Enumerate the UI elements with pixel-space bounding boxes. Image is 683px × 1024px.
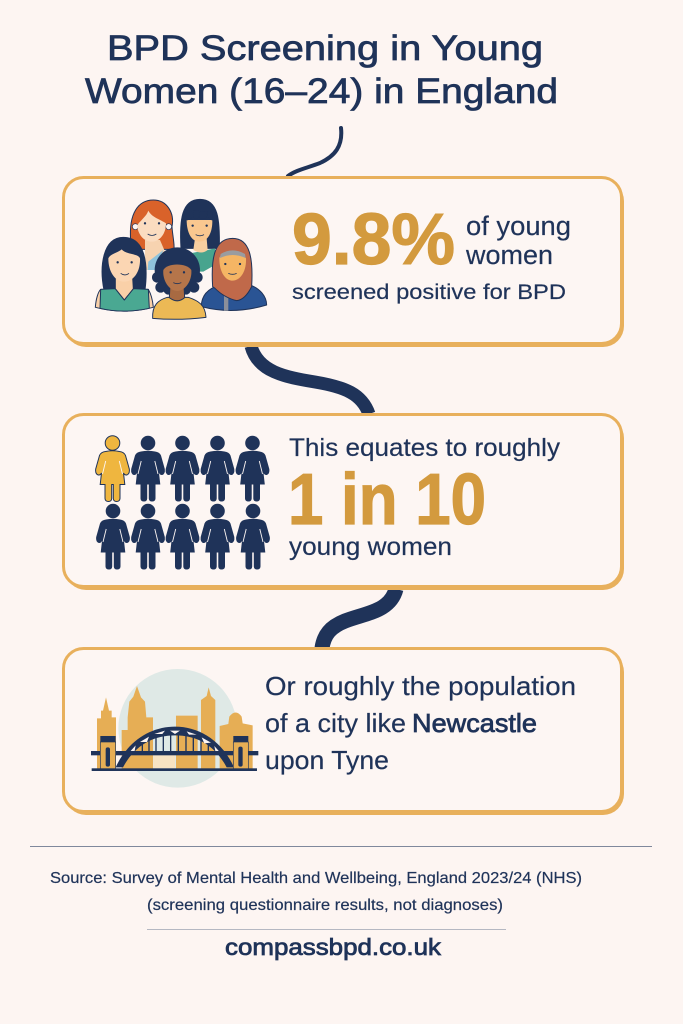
text: of young women: women <box>465 240 553 270</box>
text: screened positive for BPD: screened positive for BPD <box>292 281 566 304</box>
source note: (screening questionnaire results, not diagnoses) <box>147 897 503 914</box>
front centre woman <box>152 247 206 319</box>
icon: group of five young women <box>95 199 267 319</box>
title: Women (16–24) in England <box>85 72 558 111</box>
text: this equates to roughly: This equates to roughly <box>289 434 561 462</box>
back left woman <box>130 200 174 270</box>
front left woman <box>95 237 153 311</box>
connector: first to second panel <box>251 346 369 414</box>
big number 9.8%: 9.8% <box>292 200 455 280</box>
connector: title to first panel <box>288 128 341 176</box>
source note <box>50 870 582 914</box>
website: compassbpd.co.uk <box>225 934 442 960</box>
title: BPD Screening in Young <box>107 29 543 68</box>
text: young women: young women <box>289 533 452 561</box>
panel: 9.8% statistic <box>64 178 624 347</box>
woman in hijab <box>201 238 267 311</box>
source note: Source: Survey of Mental Health and Wellbeing, England 2023/24 (NHS) <box>50 870 582 887</box>
back right woman <box>181 199 219 272</box>
big number 1 in 10: 1 in 10 <box>288 460 486 540</box>
icon: ten women pictogram, one highlighted <box>96 436 270 570</box>
title <box>85 29 558 111</box>
connector: second to third panel <box>322 589 396 648</box>
highlighted woman <box>96 436 129 502</box>
hangers <box>142 733 208 752</box>
text: population comparison: Newcastle <box>412 708 537 738</box>
text: population comparison: upon Tyne <box>265 745 389 775</box>
icon: Newcastle skyline and Tyne Bridge <box>91 669 258 788</box>
text: of young women: of young <box>466 211 571 241</box>
text: population comparison: of a city like <box>265 708 406 738</box>
text: population comparison: Or roughly the population <box>265 671 576 701</box>
text: population comparison <box>265 671 576 775</box>
panel: 1 in 10 statistic <box>64 414 624 590</box>
text: of young women <box>465 211 571 270</box>
panel: Newcastle comparison <box>64 648 624 815</box>
arch truss <box>116 727 234 767</box>
